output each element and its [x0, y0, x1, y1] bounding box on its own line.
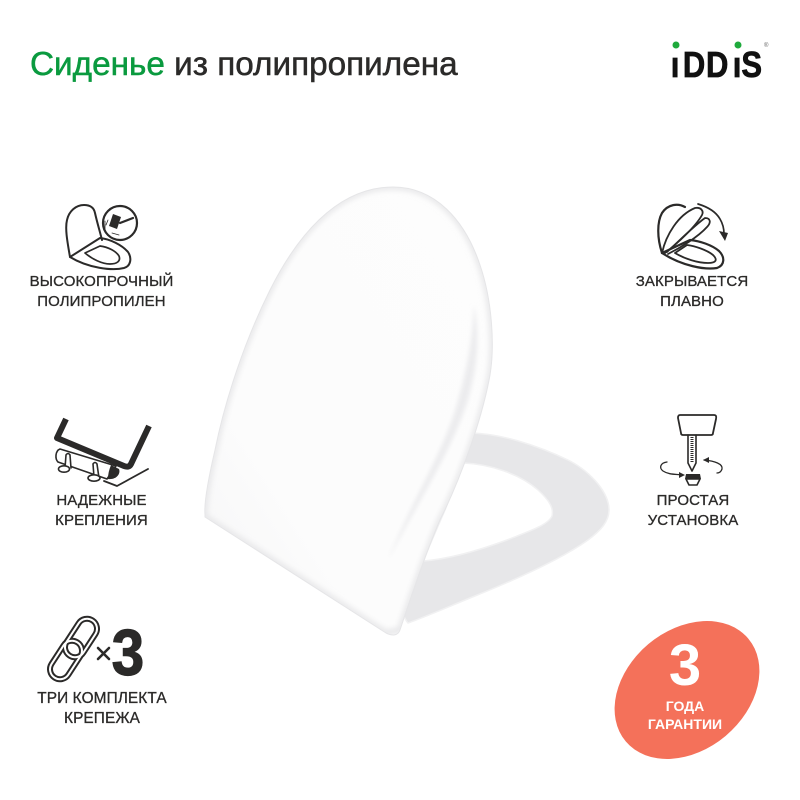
- label: fasteners: КРЕПЛЕНИЯ: [55, 512, 148, 529]
- label: easy install: ПРОСТАЯ: [657, 492, 729, 509]
- badge: 3-year warranty: ГАРАНТИИ: [648, 716, 722, 732]
- label: soft close: ПЛАВНО: [660, 293, 724, 310]
- seat ring: [400, 433, 609, 623]
- title: Сиденье из полипропилена: [30, 46, 458, 83]
- label: fasteners: НАДЕЖНЫЕ: [56, 492, 147, 509]
- logo: IDDIS: ®: [764, 42, 769, 49]
- logo: IDDIS: ıDDıS: [671, 46, 762, 86]
- label: fasteners: [55, 492, 148, 529]
- label: material: [30, 272, 173, 310]
- icon: chain links x3: 3: [112, 617, 144, 690]
- label: easy install: УСТАНОВКА: [648, 512, 738, 529]
- label: easy install: [648, 492, 738, 529]
- product: toilet seat: [204, 186, 610, 636]
- badge: 3-year warranty: 3: [669, 633, 701, 698]
- badge: 3-year warranty: ГОДА: [666, 698, 704, 714]
- label: soft close: [636, 273, 748, 310]
- label: material: ПОЛИПРОПИЛЕН: [37, 293, 166, 310]
- lid: [205, 187, 492, 635]
- lid edge highlight: [388, 305, 477, 560]
- label: kits: [37, 690, 167, 727]
- label: kits: ТРИ КОМПЛЕКТА: [37, 690, 167, 707]
- label: kits: КРЕПЕЖА: [64, 710, 140, 727]
- lid edge shading: [205, 187, 492, 633]
- label: material: ВЫСОКОПРОЧНЫЙ: [30, 273, 173, 290]
- label: soft close: ЗАКРЫВАЕТСЯ: [636, 273, 748, 290]
